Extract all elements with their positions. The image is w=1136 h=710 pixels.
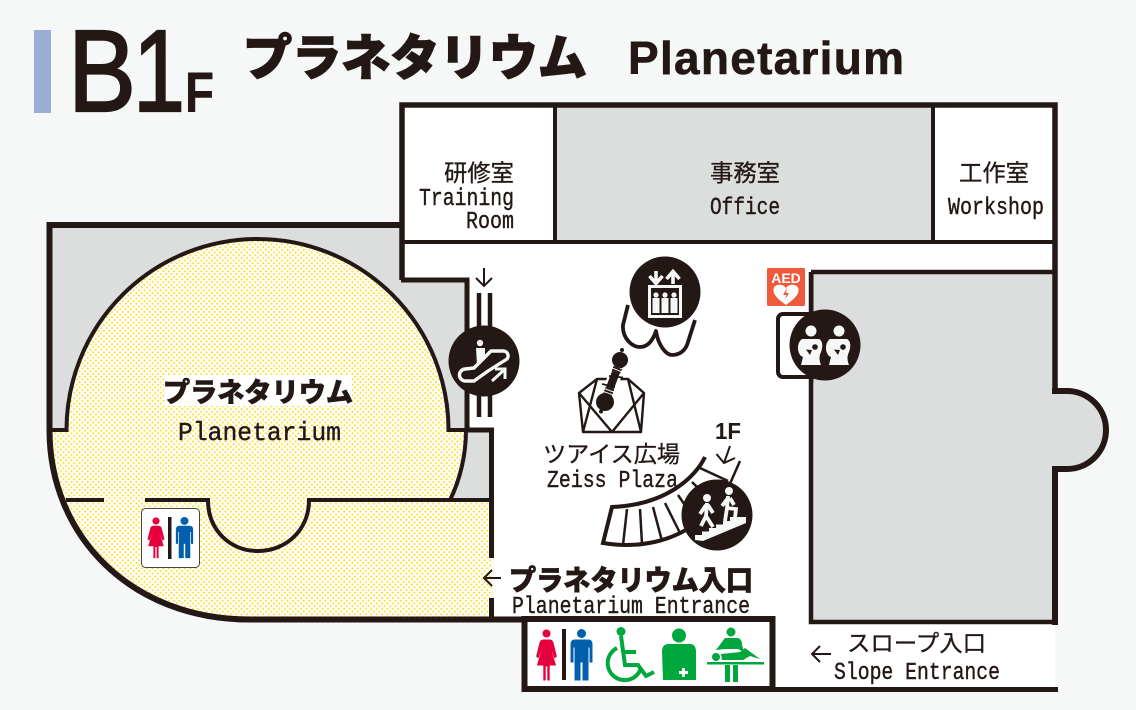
label: office [710,160,780,222]
man [570,629,592,680]
floor plan [50,105,1106,692]
icon: AED [767,268,805,306]
label: slope entrance: Slope Entrance [834,660,1000,687]
label: training room: Training [419,186,514,213]
top rooms bottom wall [402,240,1056,244]
man [176,517,193,558]
white floor [404,244,1055,688]
lobby wall left stub [66,498,104,502]
label: 1F: 1F [715,418,741,444]
top rooms: white [403,106,1054,242]
floor label B1F: B [68,6,136,136]
woman [148,517,164,558]
label: workshop: 工作室 [959,160,1029,186]
room dividers [555,106,933,242]
planetarium wing: grey surround [50,225,491,500]
planetarium dome: yellow circle [66,239,449,430]
label: training room: 研修室 [444,160,514,186]
top block outline [402,105,1055,391]
outer wall of planetarium wing [50,225,527,620]
title: Planetarium [628,32,904,84]
icon: restroom sign [142,508,200,568]
arrow: planetarium entrance [484,570,501,586]
lower right curved wall [450,430,466,500]
label: planetarium entrance: プラネタリウム入口 [509,565,753,596]
dome circle wall [52,239,466,430]
massage / first aid bed [707,628,764,682]
label: planetarium entrance: Planetarium Entrance [512,594,750,621]
floor label B1F: 1 [133,6,185,136]
entrance jamb [489,598,494,618]
label: training room [419,160,514,236]
wheelchair [608,627,654,680]
title: プラネタリウム [243,32,587,86]
icon: zeiss projector and polyhedron [579,348,644,432]
corridor wall [401,280,492,558]
walls [50,105,1106,625]
label: office: 事務室 [710,160,780,186]
lobby wall with semicircle [145,500,491,551]
label: planetarium entrance [509,565,753,621]
arrow: escalator down [476,268,492,286]
right room wall with apse [1052,391,1106,625]
service box [524,619,772,689]
label: slope entrance [834,630,1000,687]
icon: curved stairs [603,457,752,550]
arrow: slope entrance [812,646,831,662]
office: grey room [556,107,932,241]
first aid person [662,628,696,680]
room labels [163,160,1044,687]
right room inner wall [811,272,1055,622]
label: zeiss plaza: ツアイス広場 [543,441,680,467]
icon: nursing room [778,272,860,382]
header accent bar [34,30,51,113]
label: planetarium: プラネタリウム [163,378,353,408]
planetarium wing: yellow lobby floor [50,430,491,619]
label: planetarium: Planetarium [178,418,341,448]
icon: AED: AED [771,270,801,286]
icon: elevator [623,256,700,355]
label: training room: Room [466,209,514,236]
woman [536,630,557,680]
title [243,32,904,86]
floor label B1F [68,6,214,136]
label: planetarium [163,375,353,448]
label: workshop: Workshop [948,195,1044,222]
right grey room [811,272,1106,622]
label: workshop [948,160,1044,222]
label: slope entrance: スロープ入口 [847,630,986,656]
icon group: service pictograms [536,627,764,682]
icon: escalator [448,293,520,417]
label: zeiss plaza [543,441,680,495]
floor label B1F: F [185,61,214,125]
label: office: Office [710,195,780,222]
arrow: 1F down [716,446,735,463]
label: zeiss plaza: Zeiss Plaza [547,468,678,495]
slope entrance bottom wall [772,687,1058,692]
